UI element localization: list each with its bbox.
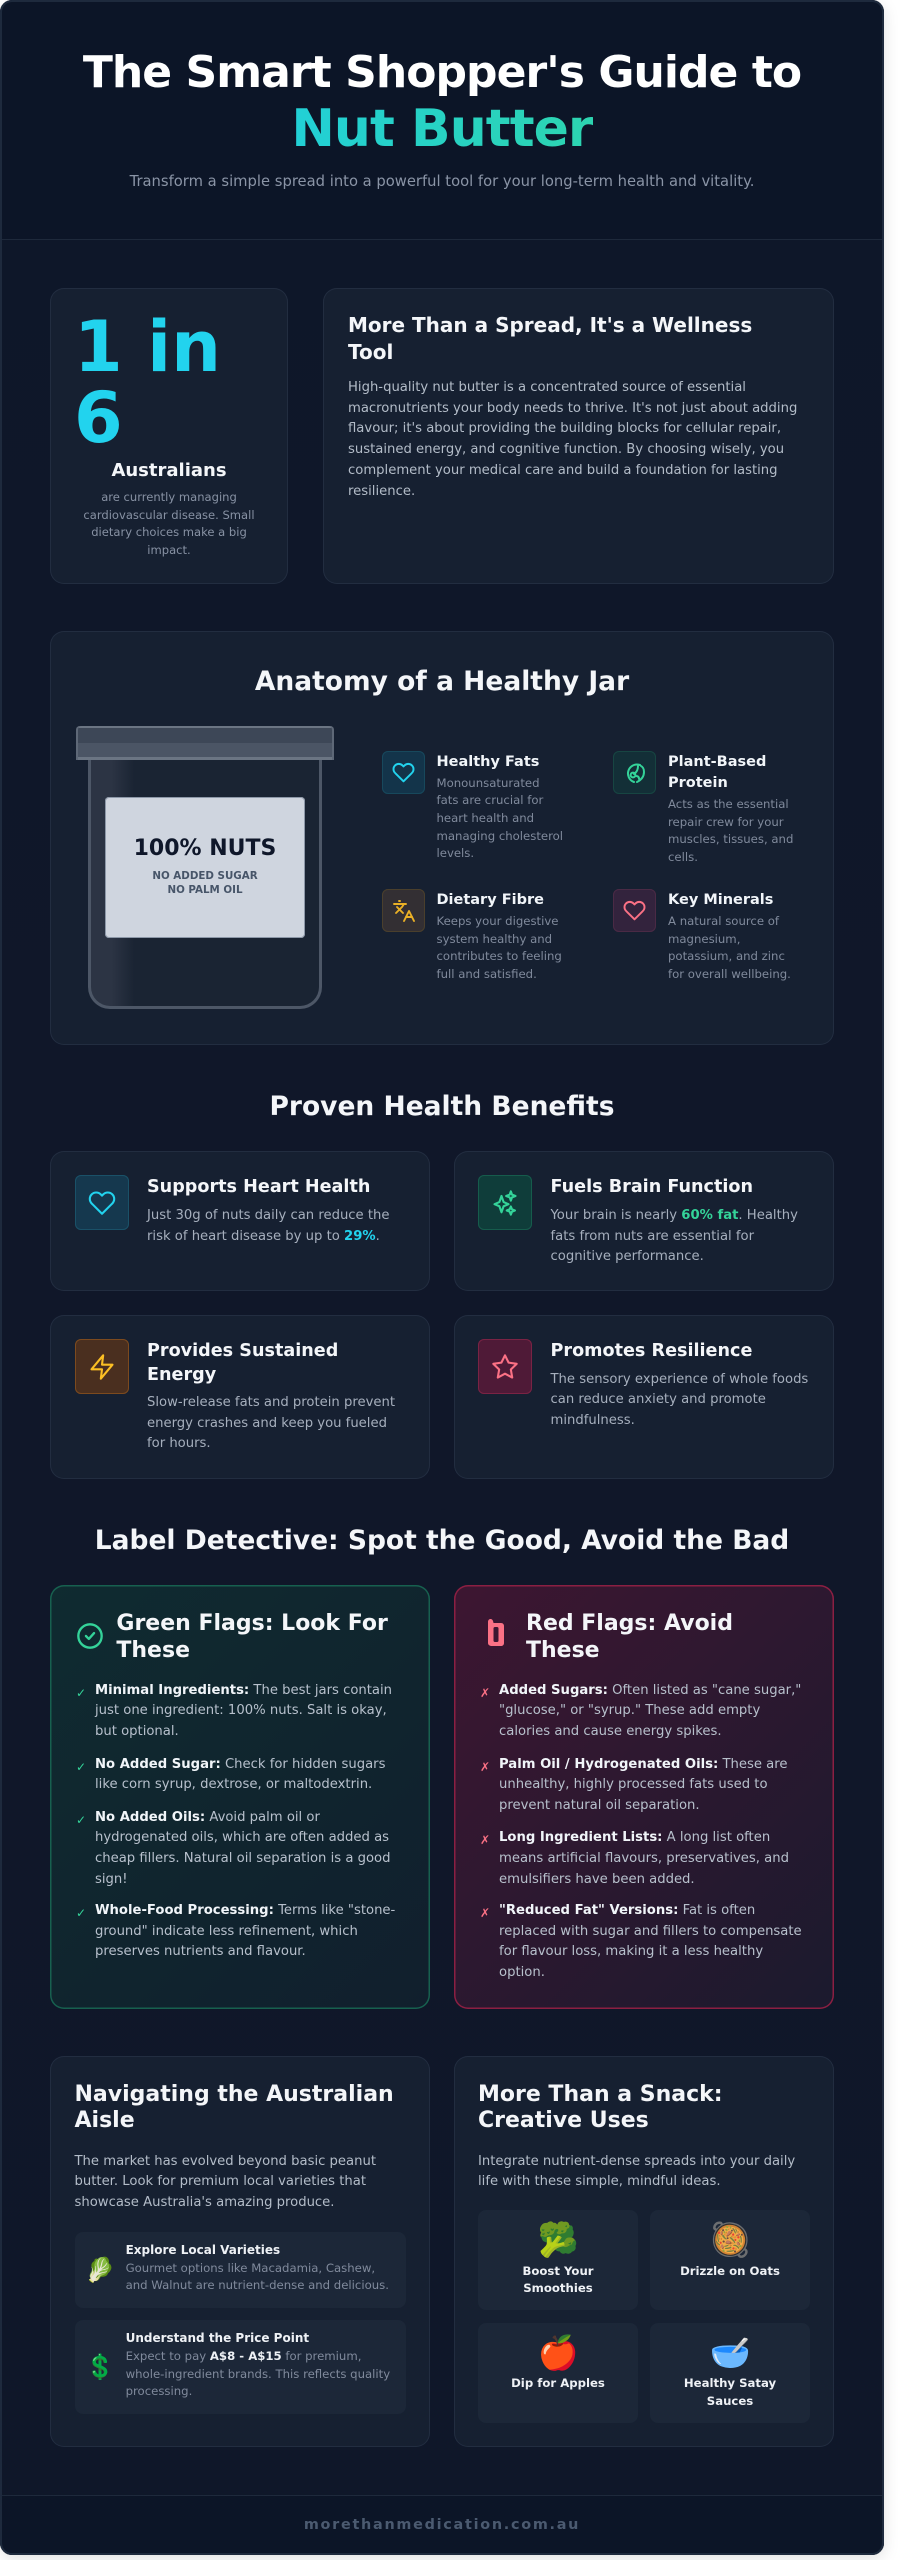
list: red flags: emulsifiers have been added.	[499, 1872, 695, 1886]
stat label: Australians	[111, 460, 227, 481]
nutrient: healthy fats	[382, 751, 563, 860]
nutrient text: cells.	[668, 850, 698, 864]
body text: macronutrients your body needs to thrive. It's not just about adding	[348, 401, 797, 416]
heading: Creative Uses	[478, 2108, 649, 2133]
icon: heart	[382, 751, 425, 794]
benefit title: Supports Heart Health	[147, 1177, 370, 1197]
body text	[74, 2154, 376, 2210]
nutrient title: Key Minerals	[668, 892, 773, 908]
big number: 1 in	[74, 306, 221, 388]
heading	[478, 2082, 723, 2133]
item: palm oil	[480, 1756, 788, 1813]
label subtext: NO PALM OIL	[167, 884, 243, 896]
benefit text: can reduce anxiety and promote	[550, 1392, 766, 1407]
panel: statistic	[50, 288, 288, 584]
nutrient text: Keeps your digestive	[436, 914, 558, 928]
benefit text: Just 30g of nuts daily can reduce the	[147, 1208, 390, 1223]
label subtext	[152, 870, 258, 896]
nutrient text: Monounsaturated	[436, 776, 540, 790]
benefit text: Your brain is nearly 60% fat. Healthy	[550, 1208, 798, 1223]
benefit text	[550, 1372, 808, 1428]
heading: Tool	[348, 340, 393, 364]
list: green flags: hydrogenated oils, which are often added as	[95, 1830, 389, 1845]
heading: These	[526, 1638, 600, 1663]
list: green flags: but optional.	[95, 1724, 179, 1739]
body text: life with these simple, mindful ideas.	[478, 2174, 721, 2189]
tile: smoothies	[478, 2210, 638, 2310]
list: green flags: No Added Oils: Avoid palm oil or	[95, 1810, 320, 1824]
list: red flags: "glucose," or "syrup." These add empty	[499, 1703, 760, 1718]
benefit text: The sensory experience of whole foods	[550, 1372, 808, 1386]
tip: local varieties	[75, 2232, 406, 2308]
tile label: Healthy Satay	[684, 2376, 776, 2390]
icon: heart	[75, 1175, 129, 1230]
nutrient title: Healthy Fats	[436, 754, 539, 770]
list: red flags: means artificial flavours, preservatives, and	[499, 1851, 789, 1866]
item: added sugars	[480, 1682, 801, 1739]
tile: apples	[478, 2323, 638, 2423]
icon: thumbs down	[488, 1619, 504, 1646]
body text: sustained energy, and cognitive function. By choosing wisely, you	[348, 442, 784, 457]
list: green flags: sign!	[95, 1872, 128, 1887]
list: green flags: ✓	[76, 1812, 86, 1826]
title: Nut Butter	[291, 99, 593, 159]
stat description: impact.	[147, 543, 191, 557]
tip: price point	[75, 2320, 406, 2414]
nutrient text	[436, 776, 563, 860]
icon: broccoli: 🥦	[537, 2220, 579, 2259]
nutrient text: levels.	[436, 846, 474, 860]
benefit text: Slow-release fats and protein prevent	[147, 1395, 395, 1410]
footer	[0, 2495, 884, 2555]
panel: anatomy of a healthy jar	[50, 631, 834, 1045]
body text: flavour; it's about providing the building blocks for cellular repair,	[348, 421, 781, 436]
tile label: Sauces	[707, 2394, 753, 2408]
benefit title	[147, 1341, 338, 1385]
benefit text: energy crashes and keep you fueled	[147, 1416, 387, 1431]
body text	[478, 2152, 795, 2193]
list: green flags: No Added Sugar: Check for hidden sugars	[95, 1756, 385, 1772]
heading: Green Flags: Look For	[116, 1611, 388, 1636]
tip text: Gourmet options like Macadamia, Cashew,	[126, 2261, 375, 2275]
nutrient text: A natural source of	[668, 914, 779, 928]
nutrient title	[668, 754, 766, 791]
benefit title: Promotes Resilience	[550, 1341, 752, 1361]
list: red flags: ✗	[480, 1760, 490, 1774]
list: red flags: "Reduced Fat" Versions: Fat is often	[499, 1903, 755, 1918]
icon: apple: 🍎	[537, 2333, 579, 2372]
item: no added sugar	[76, 1756, 385, 1792]
heading	[74, 2082, 394, 2133]
benefit text: for hours.	[147, 1436, 211, 1451]
list: green flags	[76, 1682, 395, 1959]
heading: label detective: Label Detective: Spot the Good, Avoid the Bad	[95, 1525, 789, 1556]
icon: lightning	[75, 1339, 129, 1394]
icon: check circle	[77, 1623, 103, 1649]
nutrient text: potassium, and zinc	[668, 949, 785, 963]
icon: star	[478, 1339, 532, 1394]
label subtext: NO ADDED SUGAR	[152, 870, 258, 882]
benefit: brain function	[454, 1151, 834, 1291]
benefit text	[146, 1208, 390, 1244]
jar label	[105, 797, 305, 938]
benefit text: cognitive performance.	[550, 1249, 704, 1264]
tile: oats	[650, 2210, 810, 2310]
nutrient title: Plant-Based	[668, 754, 766, 770]
nutrient title: Dietary Fibre	[436, 892, 544, 908]
benefit text	[550, 1208, 798, 1264]
tile label: Smoothies	[523, 2281, 593, 2295]
list: red flags: ✗	[480, 1906, 490, 1920]
nutrient text: fats are crucial for	[436, 793, 543, 807]
icon: fibre	[382, 889, 425, 932]
panel: creative uses	[454, 2056, 834, 2447]
big number: 6	[74, 377, 123, 459]
heading: Navigating the Australian	[74, 2082, 394, 2106]
stat description: are currently managing	[101, 490, 237, 504]
benefit: resilience	[454, 1315, 834, 1479]
nutrient text: full and satisfied.	[436, 967, 537, 981]
nutrient text: repair crew for your	[668, 814, 784, 828]
list: red flags: calories and cause energy spikes.	[499, 1724, 722, 1739]
heading	[116, 1611, 388, 1663]
tip title: Understand the Price Point	[126, 2331, 309, 2345]
list: green flags: cheap fillers. Natural oil separation is a good	[95, 1851, 390, 1866]
list: green flags: ground" indicate less refinement, which	[95, 1924, 358, 1939]
heading: proven health benefits: Proven Health Benefits	[269, 1091, 614, 1122]
list: red flags: for flavour loss, making it a less healthy	[499, 1944, 763, 1959]
body text: complement your medical care and build a foundation for lasting	[348, 463, 778, 478]
item: minimal ingredients	[76, 1682, 392, 1739]
heading: More Than a Spread, It's a Wellness	[348, 313, 752, 337]
stat description: dietary choices make a big	[91, 525, 247, 539]
tile label: Dip for Apples	[511, 2376, 605, 2390]
nutrient text: Acts as the essential	[668, 797, 789, 811]
heading	[526, 1611, 733, 1663]
benefit text	[147, 1395, 395, 1451]
heading: Anatomy of a Healthy Jar	[255, 666, 629, 697]
heading: More Than a Snack:	[478, 2082, 723, 2106]
header	[0, 0, 884, 240]
heading: Aisle	[74, 2108, 135, 2133]
heading	[348, 313, 752, 364]
nutrient: key minerals	[613, 889, 791, 981]
list: green flags: ✓	[76, 1686, 86, 1700]
heading: These	[116, 1638, 190, 1663]
jar body	[88, 756, 322, 1009]
list: red flags: Palm Oil / Hydrogenated Oils: These are	[499, 1756, 788, 1772]
body text: showcase Australia's amazing produce.	[74, 2195, 334, 2210]
icon: dollar: 💲	[85, 2353, 115, 2381]
benefit: sustained energy	[50, 1315, 430, 1479]
tip text	[126, 2349, 390, 2398]
benefit title: Fuels Brain Function	[550, 1177, 753, 1197]
icon: protein	[613, 751, 656, 794]
nutrient text: for overall wellbeing.	[668, 967, 791, 981]
nutrient: dietary fibre	[382, 889, 562, 981]
body text: butter. Look for premium local varieties that	[74, 2174, 366, 2189]
body text: Integrate nutrient-dense spreads into your daily	[478, 2154, 795, 2168]
stat description	[83, 490, 255, 557]
list: green flags: Minimal Ingredients: The best jars contain	[95, 1682, 392, 1698]
tile label: Boost Your	[522, 2264, 594, 2278]
panel: navigating the australian aisle	[50, 2056, 430, 2447]
nutrient text: muscles, tissues, and	[668, 832, 793, 846]
list: green flags: just one ingredient: 100% nuts. Salt is okay,	[95, 1703, 387, 1718]
subtitle: Transform a simple spread into a powerful tool for your long-term health and vitality.	[130, 173, 754, 190]
panel: green flags	[50, 1585, 430, 2009]
tile: satay	[650, 2323, 810, 2423]
heading: Red Flags: Avoid	[526, 1611, 733, 1636]
benefit title: Provides Sustained	[147, 1341, 338, 1361]
list: green flags: Whole-Food Processing: Terms like "stone-	[95, 1903, 395, 1918]
tip text	[126, 2261, 389, 2292]
list: green flags: ✓	[76, 1906, 86, 1920]
list: red flags: replaced with sugar and fillers to compensate	[499, 1924, 802, 1939]
label title: 100% NUTS	[134, 836, 276, 861]
benefit text: mindfulness.	[550, 1413, 635, 1428]
list: red flags: Added Sugars: Often listed as "cane sugar,"	[499, 1682, 801, 1698]
title	[83, 47, 801, 159]
stat description: cardiovascular disease. Small	[83, 508, 255, 522]
jar lid	[76, 726, 334, 760]
panel: wellness tool	[323, 288, 834, 584]
nutrient text: contributes to feeling	[436, 949, 562, 963]
item: reduced fat	[480, 1903, 802, 1980]
benefit: heart health	[50, 1151, 430, 1291]
title: The Smart Shopper's Guide to	[83, 47, 801, 98]
nutrient text: magnesium,	[668, 932, 740, 946]
nutrient text: managing cholesterol	[436, 829, 563, 843]
nutrient text	[436, 914, 562, 981]
benefit text: risk of heart disease by up to 29%.	[147, 1229, 380, 1244]
item: no added oils	[76, 1810, 390, 1887]
nutrient text: system healthy and	[436, 932, 552, 946]
body text: The market has evolved beyond basic peanut	[74, 2154, 376, 2168]
tip text: and Walnut are nutrient-dense and delicious.	[126, 2278, 389, 2292]
nutrient text	[668, 914, 791, 981]
list: red flags: Long Ingredient Lists: A long list often	[499, 1830, 770, 1845]
icon: sparkles	[478, 1175, 532, 1230]
tip title: Explore Local Varieties	[126, 2243, 280, 2257]
icon: food pan: 🥘	[709, 2220, 751, 2259]
tip text: processing.	[126, 2384, 192, 2398]
body text: resilience.	[348, 484, 415, 499]
tip text: whole-ingredient brands. This reflects quality	[126, 2367, 390, 2381]
icon: minerals heart	[613, 889, 656, 932]
item: long ingredient lists	[480, 1830, 789, 1886]
big number	[74, 306, 221, 459]
icon: leafy green: 🥬	[85, 2256, 115, 2284]
nutrient text	[668, 797, 793, 864]
body text: High-quality nut butter is a concentrated source of essential	[348, 380, 746, 395]
nutrient text: heart health and	[436, 811, 534, 825]
body text	[348, 380, 797, 499]
benefit text: fats from nuts are essential for	[550, 1229, 754, 1244]
list: red flags: prevent natural oil separation.	[499, 1798, 700, 1813]
icon: bowl: 🥣	[709, 2333, 751, 2372]
list: red flags: ✗	[480, 1686, 490, 1700]
tile label	[650, 2375, 810, 2411]
panel: red flags	[454, 1585, 834, 2009]
list: green flags: ✓	[76, 1760, 86, 1774]
tile label: Drizzle on Oats	[680, 2264, 780, 2278]
footer url: morethanmedication.com.au	[304, 2517, 580, 2533]
list: red flags: ✗	[480, 1833, 490, 1847]
benefit title: Energy	[147, 1365, 216, 1385]
list: red flags	[480, 1682, 802, 1980]
nutrient: plant-based protein	[613, 751, 793, 864]
jar illustration	[76, 726, 334, 1009]
tip text: Expect to pay A$8 - A$15 for premium,	[126, 2349, 361, 2363]
nutrient title: Protein	[668, 775, 728, 791]
item: whole-food processing	[76, 1903, 395, 1959]
tile label	[478, 2263, 638, 2298]
list: red flags: option.	[499, 1965, 545, 1980]
list: green flags: like corn syrup, dextrose, or maltodextrin.	[95, 1777, 372, 1792]
list: green flags: preserves nutrients and flavour.	[95, 1944, 306, 1959]
list: red flags: unhealthy, highly processed fats used to	[499, 1777, 768, 1792]
